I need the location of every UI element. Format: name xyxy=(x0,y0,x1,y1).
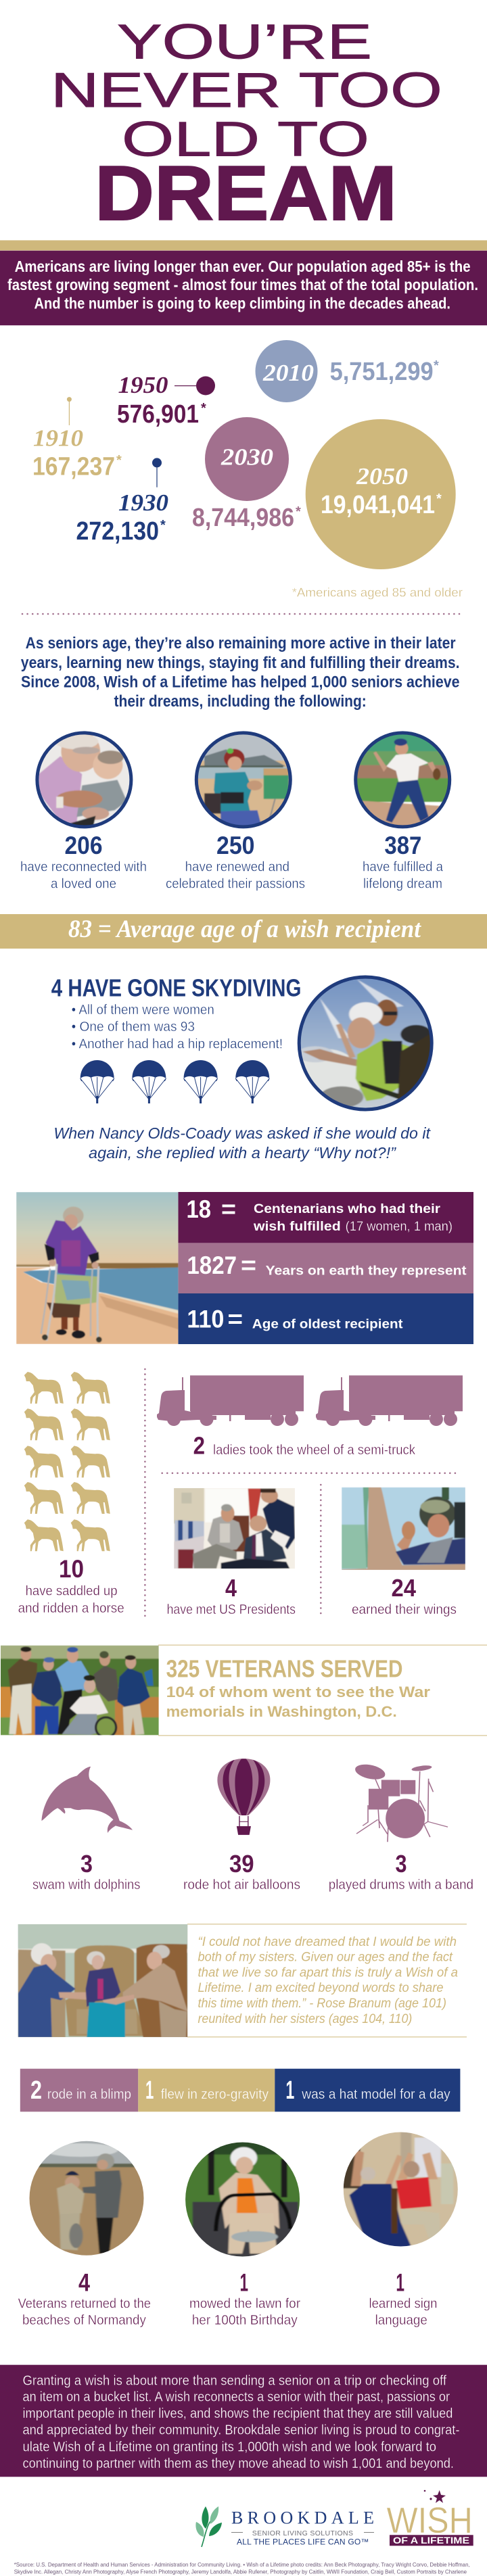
stat: years on earth: Years on earth they represent xyxy=(266,1264,467,1278)
stat: semi-trucks xyxy=(157,1375,463,1460)
population chart xyxy=(32,340,456,569)
stat: reconnected xyxy=(20,727,147,891)
pin: 1910: 167,237 xyxy=(32,452,115,481)
stat: balloons xyxy=(183,1759,300,1892)
stat: centenarians: Centenarians who had their xyxy=(254,1202,441,1216)
stat: dolphins: swam with dolphins xyxy=(32,1878,141,1892)
icon: parachutes xyxy=(80,1060,269,1103)
photo: beaches of Normandy xyxy=(30,2141,143,2256)
photo: pilot thumbs up xyxy=(342,1487,465,1570)
logo: Brookdale: BROOKDALE xyxy=(231,2508,374,2527)
sisters quote: Lifetime. I am excited beyond words to share xyxy=(198,1981,444,1995)
stat: reconnected: 206 xyxy=(65,832,103,859)
centenarian panel xyxy=(16,1192,473,1344)
stat: reconnected: have reconnected with xyxy=(20,860,147,875)
stat: mowed lawn: her 100th Birthday xyxy=(192,2313,298,2328)
photo: three sisters xyxy=(17,1924,189,2038)
skydiving panel xyxy=(51,973,436,1162)
bubble: 2010: 5,751,299 xyxy=(330,358,434,386)
skydiving bullets: • Another had had a hip replacement! xyxy=(72,1036,283,1051)
sisters quote: reunited with her sisters (ages 104, 110) xyxy=(198,2012,412,2026)
bubble: 2030: 2030 xyxy=(221,444,273,470)
bubble: 2030: 8,744,986 xyxy=(192,504,294,532)
photo: tandem skydive xyxy=(290,973,436,1113)
stat: centenarians: = xyxy=(221,1195,236,1223)
bubble: 2030 xyxy=(192,417,301,532)
chart footnote: *Americans aged 85 and older xyxy=(292,586,463,600)
stat: drums xyxy=(329,1762,473,1892)
sisters panel xyxy=(17,1924,467,2038)
stat: lifelong dream: lifelong dream xyxy=(363,876,442,891)
stat: Normandy: Veterans returned to the xyxy=(18,2296,151,2311)
bubble: 2050: * xyxy=(436,492,442,506)
photo: painter on beach xyxy=(195,731,292,829)
logo: Wish of a Lifetime: OF A LIFETIME xyxy=(393,2535,469,2546)
stat: horses xyxy=(18,1372,124,1616)
pin: 1910: * xyxy=(116,453,122,468)
stat: dolphins xyxy=(32,1767,141,1892)
stat: oldest recipient: 110 xyxy=(187,1306,224,1333)
veterans panel: memorials in Washington, D.C. xyxy=(166,1703,397,1720)
stat: passions xyxy=(166,727,305,891)
stat: drums: 3 xyxy=(395,1850,407,1878)
average age band xyxy=(0,914,487,949)
skydiving quote: When Nancy Olds-Coady was asked if she would do it xyxy=(53,1124,432,1142)
stat: zero gravity: flew in zero-gravity xyxy=(161,2087,269,2102)
stat: semi-trucks: 2 xyxy=(193,1432,205,1460)
stat: passions: have renewed and xyxy=(185,860,289,875)
three-part stat band xyxy=(20,2069,460,2112)
skydiving heading: 4 HAVE GONE SKYDIVING xyxy=(51,974,301,1002)
stat: dolphins: 3 xyxy=(80,1850,93,1878)
icon: hot air balloon xyxy=(217,1759,270,1835)
stat: sign language: learned sign xyxy=(369,2296,437,2311)
stat: reconnected: a loved one xyxy=(51,876,116,891)
closing panel: Granting a wish is about more than sending a senior on a trip or checking off xyxy=(23,2373,446,2388)
logo: Brookdale: ALL THE PLACES LIFE CAN GO™ xyxy=(237,2537,369,2546)
stat: mowed lawn xyxy=(180,2139,304,2328)
photo: veterans group xyxy=(0,1645,162,1738)
stat: sign language: language xyxy=(375,2313,427,2328)
icon: leaves xyxy=(195,2506,222,2547)
title: NEVER TOO xyxy=(51,64,442,118)
stat: Normandy: 4 xyxy=(78,2268,90,2296)
photo: grandmother and baby xyxy=(35,731,133,829)
stat: oldest recipient xyxy=(179,1293,473,1344)
closing panel: and appreciated by their community. Brookdale senior living is proud to congrat- xyxy=(23,2423,460,2438)
title: OLD TO xyxy=(122,112,369,166)
stat: blimp xyxy=(20,2069,138,2112)
pin: 1950 xyxy=(117,372,215,429)
stat: centenarians: wish fulfilled xyxy=(253,1220,341,1234)
veterans panel xyxy=(0,1645,487,1738)
logo: Wish of a Lifetime: WISH xyxy=(387,2500,473,2541)
stat: presidents: have met US Presidents xyxy=(167,1602,296,1617)
skydiving quote: again, she replied with a hearty “Why not?!” xyxy=(89,1144,396,1162)
bubble: 2030: * xyxy=(296,504,301,519)
intro panel xyxy=(0,251,487,325)
stat: lifelong dream xyxy=(354,731,452,891)
stat: mowed lawn: 1 xyxy=(239,2268,248,2296)
average age band: 83 = Average age of a wish recipient xyxy=(68,915,422,943)
stat: centenarians xyxy=(179,1192,473,1243)
stat: passions: 250 xyxy=(216,832,254,859)
sisters quote: both of my sisters. Given our ages and the fact xyxy=(198,1951,453,1965)
stat: wings xyxy=(342,1487,465,1617)
title: DREAM xyxy=(95,151,397,237)
stat: hat model xyxy=(275,2069,460,2112)
sisters quote xyxy=(198,1935,458,2026)
closing panel: ulate Wish of a Lifetime on granting its 1,000th wish and we look forward to xyxy=(23,2439,436,2454)
bubble: 2050 xyxy=(306,419,456,569)
bubble: 2010 xyxy=(256,340,439,402)
pin: 1930 xyxy=(76,458,168,546)
stat: Normandy: beaches of Normandy xyxy=(22,2313,146,2328)
logo: Brookdale: SENIOR LIVING SOLUTIONS xyxy=(252,2529,353,2537)
photo: sign language class xyxy=(344,2132,458,2246)
stat: mowed lawn: mowed the lawn for xyxy=(189,2296,300,2311)
pin: 1930: 272,130 xyxy=(76,517,159,546)
stat: presidents: 4 xyxy=(225,1574,237,1602)
source credits xyxy=(14,2561,470,2575)
closing panel: an item on a bucket list. A wish reconnects a senior with their past, passions or xyxy=(23,2390,450,2405)
stat: lifelong dream: have fulfilled a xyxy=(363,860,444,875)
stat: sign language xyxy=(338,2130,463,2328)
stat: blimp: 2 xyxy=(30,2076,42,2105)
pin: 1930: * xyxy=(160,518,166,533)
stat: oldest recipient: Age of oldest recipient xyxy=(252,1317,403,1332)
stat: lifelong dream: 387 xyxy=(384,832,421,859)
photo: meeting a president xyxy=(174,1487,296,1570)
stat: years on earth xyxy=(179,1243,473,1293)
icon: horses xyxy=(24,1372,110,1551)
stat: centenarians: (17 women, 1 man) xyxy=(346,1220,453,1234)
stat: wings: earned their wings xyxy=(352,1602,457,1617)
stat: zero gravity: 1 xyxy=(145,2076,154,2105)
stat: hat model: was a hat model for a day xyxy=(301,2087,450,2102)
gold band xyxy=(0,240,487,250)
sisters quote: this time with them.” - Rose Branum (age 101) xyxy=(198,1997,446,2011)
veterans panel: 104 of whom went to see the War xyxy=(166,1684,430,1700)
stat: hat model: 1 xyxy=(285,2076,294,2105)
skydiving bullets: • One of them was 93 xyxy=(72,1020,195,1034)
stat: blimp: rode in a blimp xyxy=(47,2087,131,2102)
logo: Wish of a Lifetime xyxy=(387,2490,473,2546)
pin: 1910 xyxy=(32,397,122,481)
title: YOU’RE xyxy=(117,15,372,69)
icon: dolphin xyxy=(42,1767,133,1833)
stat: balloons: rode hot air balloons xyxy=(183,1878,300,1892)
stat: presidents xyxy=(167,1487,296,1617)
stat: years on earth: 1827 xyxy=(187,1251,237,1279)
photo: first pitch xyxy=(354,731,452,829)
skydiving quote xyxy=(53,1124,432,1162)
skydiving bullets xyxy=(72,1003,283,1051)
pin: 1910: 1910 xyxy=(33,425,83,452)
stat: passions: celebrated their passions xyxy=(166,876,305,891)
logo: Brookdale xyxy=(195,2506,374,2547)
stat: horses: 10 xyxy=(59,1555,84,1583)
stat: horses: have saddled up xyxy=(26,1584,117,1599)
seniors paragraph: their dreams, including the following: xyxy=(114,692,367,711)
stat: horses: and ridden a horse xyxy=(18,1601,124,1616)
skydiving bullets: • All of them were women xyxy=(72,1003,214,1018)
pin: 1950: 1950 xyxy=(118,372,168,398)
sisters quote: that we live so far apart this is truly a Wish of a xyxy=(198,1966,458,1980)
stat: sign language: 1 xyxy=(396,2268,404,2296)
photo: woman on lawn mower xyxy=(185,2142,300,2257)
bubble: 2010: 2010 xyxy=(262,360,314,386)
icon: trucks xyxy=(157,1375,463,1426)
stat: wings: 24 xyxy=(391,1574,416,1602)
seniors paragraph xyxy=(21,634,460,711)
icon: drum kit xyxy=(352,1762,448,1842)
stat: years on earth: = xyxy=(241,1251,256,1279)
stat: Normandy xyxy=(18,2139,151,2328)
pin: 1930: 1930 xyxy=(118,490,168,516)
stat: zero gravity xyxy=(138,2069,275,2112)
stat: drums: played drums with a band xyxy=(329,1878,473,1892)
bubble: 2050: 2050 xyxy=(356,463,408,490)
pin: 1950: * xyxy=(201,401,206,416)
stat: semi-trucks: ladies took the wheel of a semi-truck xyxy=(213,1443,416,1458)
closing panel: continuing to partner with them as they move ahead to wish 1,001 and beyond. xyxy=(23,2456,454,2471)
veterans panel: 325 VETERANS SERVED xyxy=(166,1655,403,1683)
stat: centenarians: 18 xyxy=(187,1195,211,1223)
photo: woman with walker on beach xyxy=(16,1192,179,1344)
title xyxy=(51,15,442,237)
closing panel: important people in their lives, and shows the recipient that they are still valued xyxy=(23,2406,453,2421)
closing panel xyxy=(0,2365,487,2477)
sisters quote: “I could not have dreamed that I would be with xyxy=(198,1935,457,1949)
bubble: 2010: * xyxy=(434,358,439,373)
bubble: 2050: 19,041,041 xyxy=(321,491,435,519)
stat: balloons: 39 xyxy=(229,1850,254,1878)
pin: 1950: 576,901 xyxy=(117,400,199,429)
stat: oldest recipient: = xyxy=(227,1306,243,1333)
